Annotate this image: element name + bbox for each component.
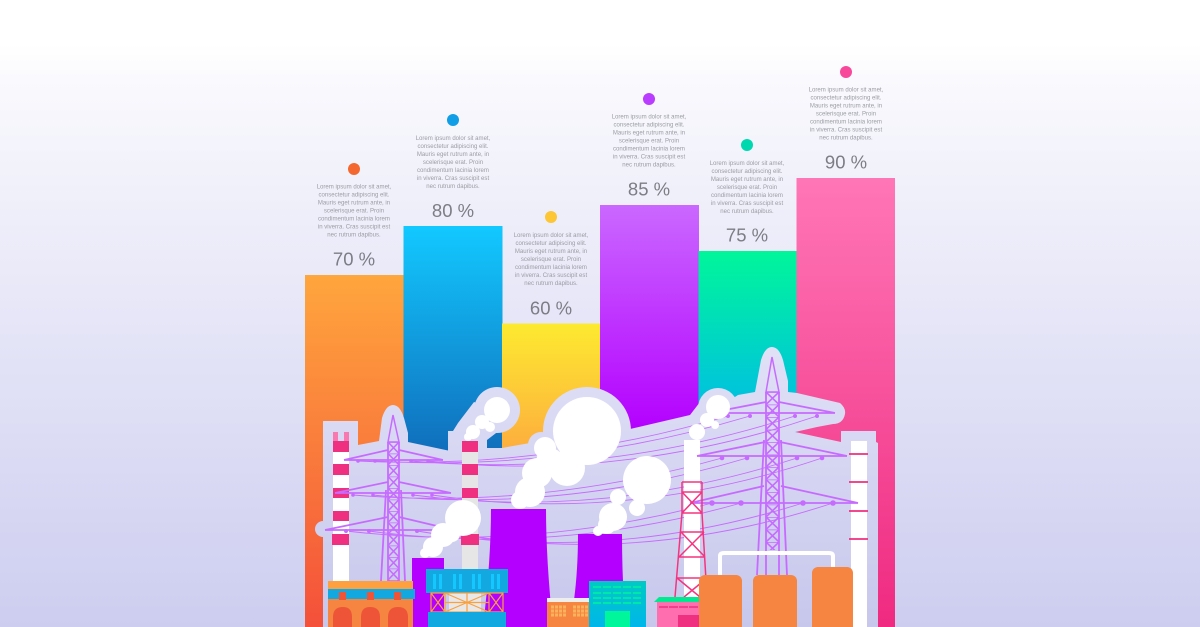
second striped chimney: [461, 441, 479, 571]
medium cloud: [593, 456, 671, 536]
column 6 labels: [809, 66, 884, 172]
description: in viverra. Cras suscipit est: [613, 154, 685, 160]
percent value: 60 %: [530, 298, 572, 318]
description: scelerisque erat. Proin: [717, 185, 777, 191]
marker dot: [545, 211, 557, 223]
bar chart: [305, 178, 895, 627]
description: Mauris eget rutrum ante, in: [515, 249, 587, 255]
left striped chimney: [332, 432, 349, 582]
red pylon: [675, 482, 707, 597]
description: condimentum lacinia lorem: [711, 193, 783, 199]
description: scelerisque erat. Proin: [521, 257, 581, 263]
description: scelerisque erat. Proin: [324, 208, 384, 214]
description: in viverra. Cras suscipit est: [711, 201, 783, 207]
description: consectetur adipiscing elit.: [811, 96, 882, 102]
description: Lorem ipsum dolor sit amet,: [514, 233, 589, 239]
marker dot: [741, 139, 753, 151]
bar: 60 %: [502, 324, 600, 627]
smoke clouds: [420, 395, 730, 558]
description: Lorem ipsum dolor sit amet,: [612, 114, 687, 120]
percent value: 75 %: [726, 224, 768, 246]
description: Lorem ipsum dolor sit amet,: [317, 184, 392, 190]
description: scelerisque erat. Proin: [619, 138, 679, 144]
column 4 labels: [612, 93, 687, 200]
chimney cloud: [420, 500, 481, 558]
description: scelerisque erat. Proin: [816, 112, 876, 118]
marker dot: [643, 93, 655, 105]
transmission tower left: [325, 415, 451, 581]
description: in viverra. Cras suscipit est: [810, 128, 882, 134]
description: Lorem ipsum dolor sit amet,: [809, 88, 884, 94]
teal building: [589, 581, 646, 627]
top cloud: [464, 397, 510, 441]
right cloud: [689, 395, 730, 440]
description: nec rutrum dapibus.: [720, 209, 774, 215]
description: condimentum lacinia lorem: [515, 265, 587, 271]
column 5 labels: [710, 139, 785, 246]
white stack behind red pylon: [684, 440, 700, 600]
percent value: 80 %: [432, 200, 474, 221]
column 1 labels: [317, 163, 392, 270]
description: Mauris eget rutrum ante, in: [417, 152, 489, 158]
bar: 70 %: [305, 275, 404, 627]
marker dot: [840, 66, 852, 78]
orange tanks: [699, 567, 853, 627]
description: Mauris eget rutrum ante, in: [810, 104, 882, 110]
description: nec rutrum dapibus.: [426, 184, 480, 190]
description: Mauris eget rutrum ante, in: [318, 200, 390, 206]
small purple block: [412, 558, 444, 627]
column 2 labels: [416, 114, 491, 221]
description: Mauris eget rutrum ante, in: [613, 130, 685, 136]
white pipe: [720, 553, 833, 580]
bar: 75 %: [698, 251, 797, 627]
description: in viverra. Cras suscipit est: [318, 224, 390, 230]
percent value: 85 %: [628, 178, 670, 200]
description: in viverra. Cras suscipit est: [417, 176, 489, 182]
column 3 labels: [514, 211, 589, 318]
description: Lorem ipsum dolor sit amet,: [710, 161, 785, 167]
bar: 90 %: [796, 178, 895, 627]
description: scelerisque erat. Proin: [423, 160, 483, 166]
small orange building: [547, 598, 595, 627]
description: Lorem ipsum dolor sit amet,: [416, 136, 491, 142]
large cloud: [511, 397, 621, 509]
description: nec rutrum dapibus.: [327, 232, 381, 238]
cooling tower large: [483, 509, 553, 627]
transmission tower right: [690, 357, 858, 575]
orange factory: [328, 581, 415, 627]
bar: 85 %: [600, 205, 699, 627]
description: nec rutrum dapibus.: [819, 136, 873, 142]
skyline halo: [315, 347, 878, 627]
description: condimentum lacinia lorem: [810, 120, 882, 126]
description: condimentum lacinia lorem: [318, 216, 390, 222]
description: condimentum lacinia lorem: [417, 168, 489, 174]
power lines: [346, 416, 833, 544]
right striped chimney: [849, 441, 868, 627]
marker dot: [447, 114, 459, 126]
description: condimentum lacinia lorem: [613, 146, 685, 152]
cooling tower small: [574, 534, 624, 600]
description: consectetur adipiscing elit.: [319, 192, 390, 198]
description: nec rutrum dapibus.: [622, 162, 676, 168]
percent value: 70 %: [333, 248, 375, 270]
description: in viverra. Cras suscipit est: [515, 273, 587, 279]
marker dot: [348, 163, 360, 175]
description: consectetur adipiscing elit.: [712, 169, 783, 175]
blue factory: [426, 569, 508, 627]
description: consectetur adipiscing elit.: [516, 241, 587, 247]
description: nec rutrum dapibus.: [524, 281, 578, 287]
description: Mauris eget rutrum ante, in: [711, 177, 783, 183]
bar: 80 %: [404, 226, 502, 627]
percent value: 90 %: [825, 152, 867, 172]
description: consectetur adipiscing elit.: [418, 144, 489, 150]
pink building: [654, 597, 700, 627]
description: consectetur adipiscing elit.: [614, 122, 685, 128]
